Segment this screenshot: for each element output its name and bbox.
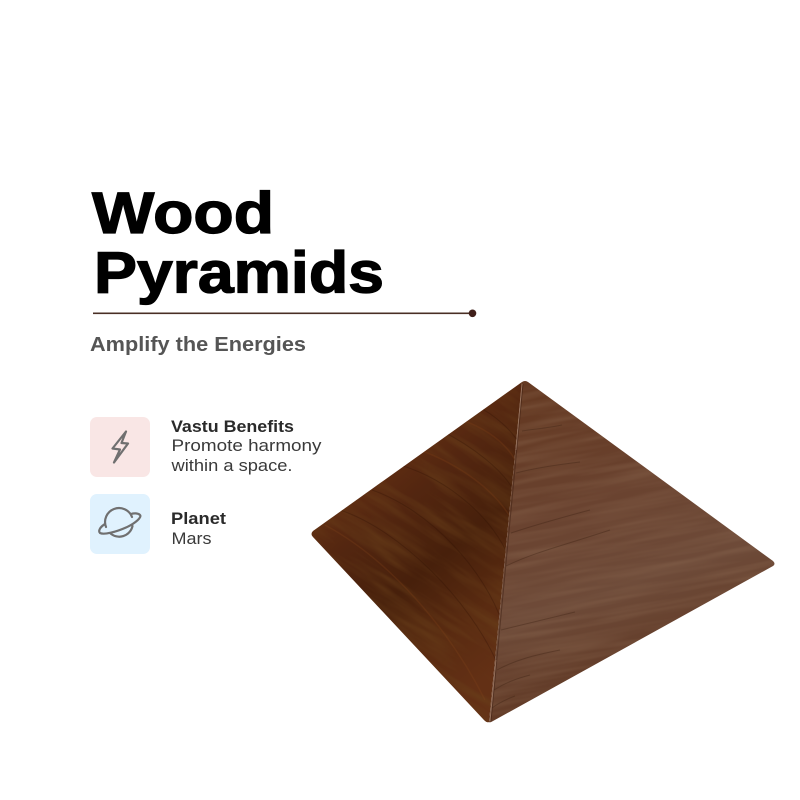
- vastu benefits text: Vastu Benefits: [171, 418, 294, 436]
- divider line with dot: [93, 310, 476, 317]
- vastu benefits text: [170, 418, 322, 475]
- icon: lightning bolt: [90, 417, 150, 477]
- ridge shadow: [491, 384, 523, 721]
- vastu benefits text: within a space.: [170, 456, 292, 475]
- title: Pyramids: [94, 240, 384, 306]
- ridge highlight: [490, 384, 522, 721]
- wood pyramid: [312, 381, 774, 722]
- planet text: [171, 510, 227, 548]
- title: [92, 181, 384, 306]
- panel: planet: [90, 494, 227, 554]
- subtitle: Amplify the Energies: [90, 333, 306, 356]
- left face: [312, 382, 522, 722]
- panel: vastu benefits: [90, 417, 322, 477]
- planet text: Mars: [172, 529, 212, 548]
- right face: [489, 381, 774, 722]
- planet text: Planet: [171, 510, 227, 528]
- icon: planet: [90, 494, 150, 554]
- vastu benefits text: Promote harmony: [172, 436, 322, 455]
- title: Wood: [92, 181, 274, 246]
